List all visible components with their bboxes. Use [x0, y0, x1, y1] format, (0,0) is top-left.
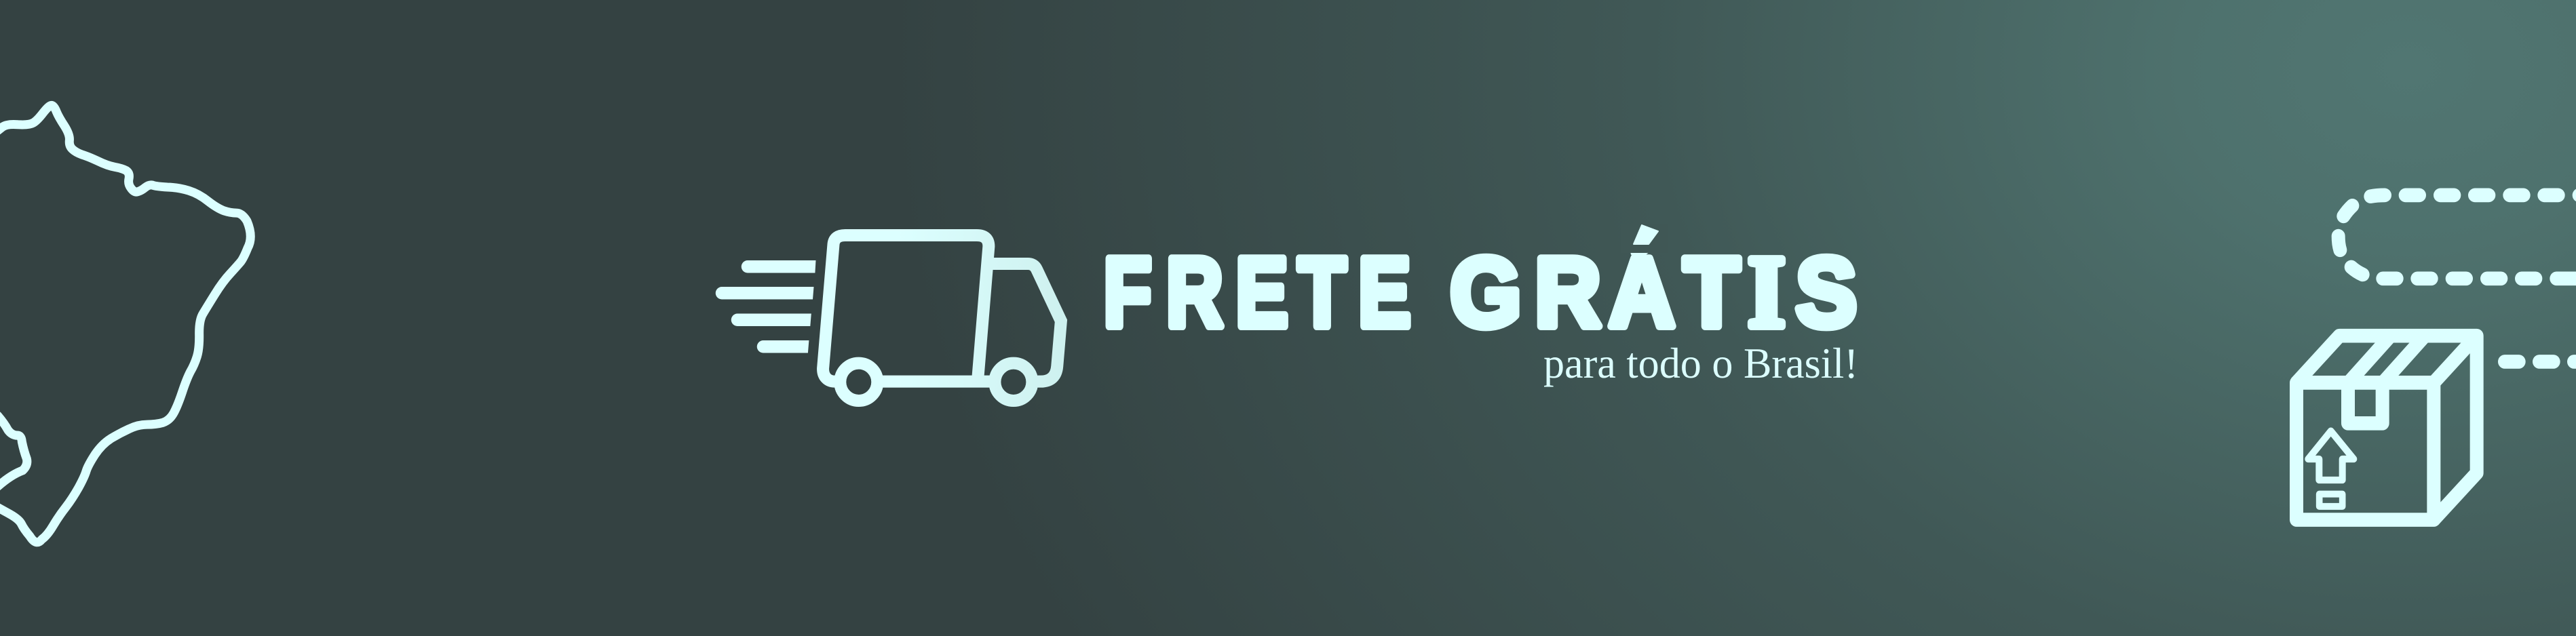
icon: dashed delivery route: [2339, 195, 2576, 361]
subtitle: para todo o Brasil!: [1543, 339, 1858, 387]
box label rectangle: [2320, 494, 2343, 506]
truck speed lines: [716, 260, 815, 353]
icon: delivery truck: [716, 235, 1061, 401]
title: GRÁTIS: GRÁTIS: [1450, 235, 1857, 349]
icon: Brazil map outline: [0, 105, 250, 542]
box up arrow symbol: [2308, 431, 2353, 480]
icon: cardboard box: [2296, 336, 2477, 520]
truck body and wheels: [823, 235, 1061, 401]
box outline: [2296, 336, 2477, 520]
title accent over the A: [1621, 224, 1668, 253]
title: FRETE: FRETE: [1104, 237, 1410, 347]
